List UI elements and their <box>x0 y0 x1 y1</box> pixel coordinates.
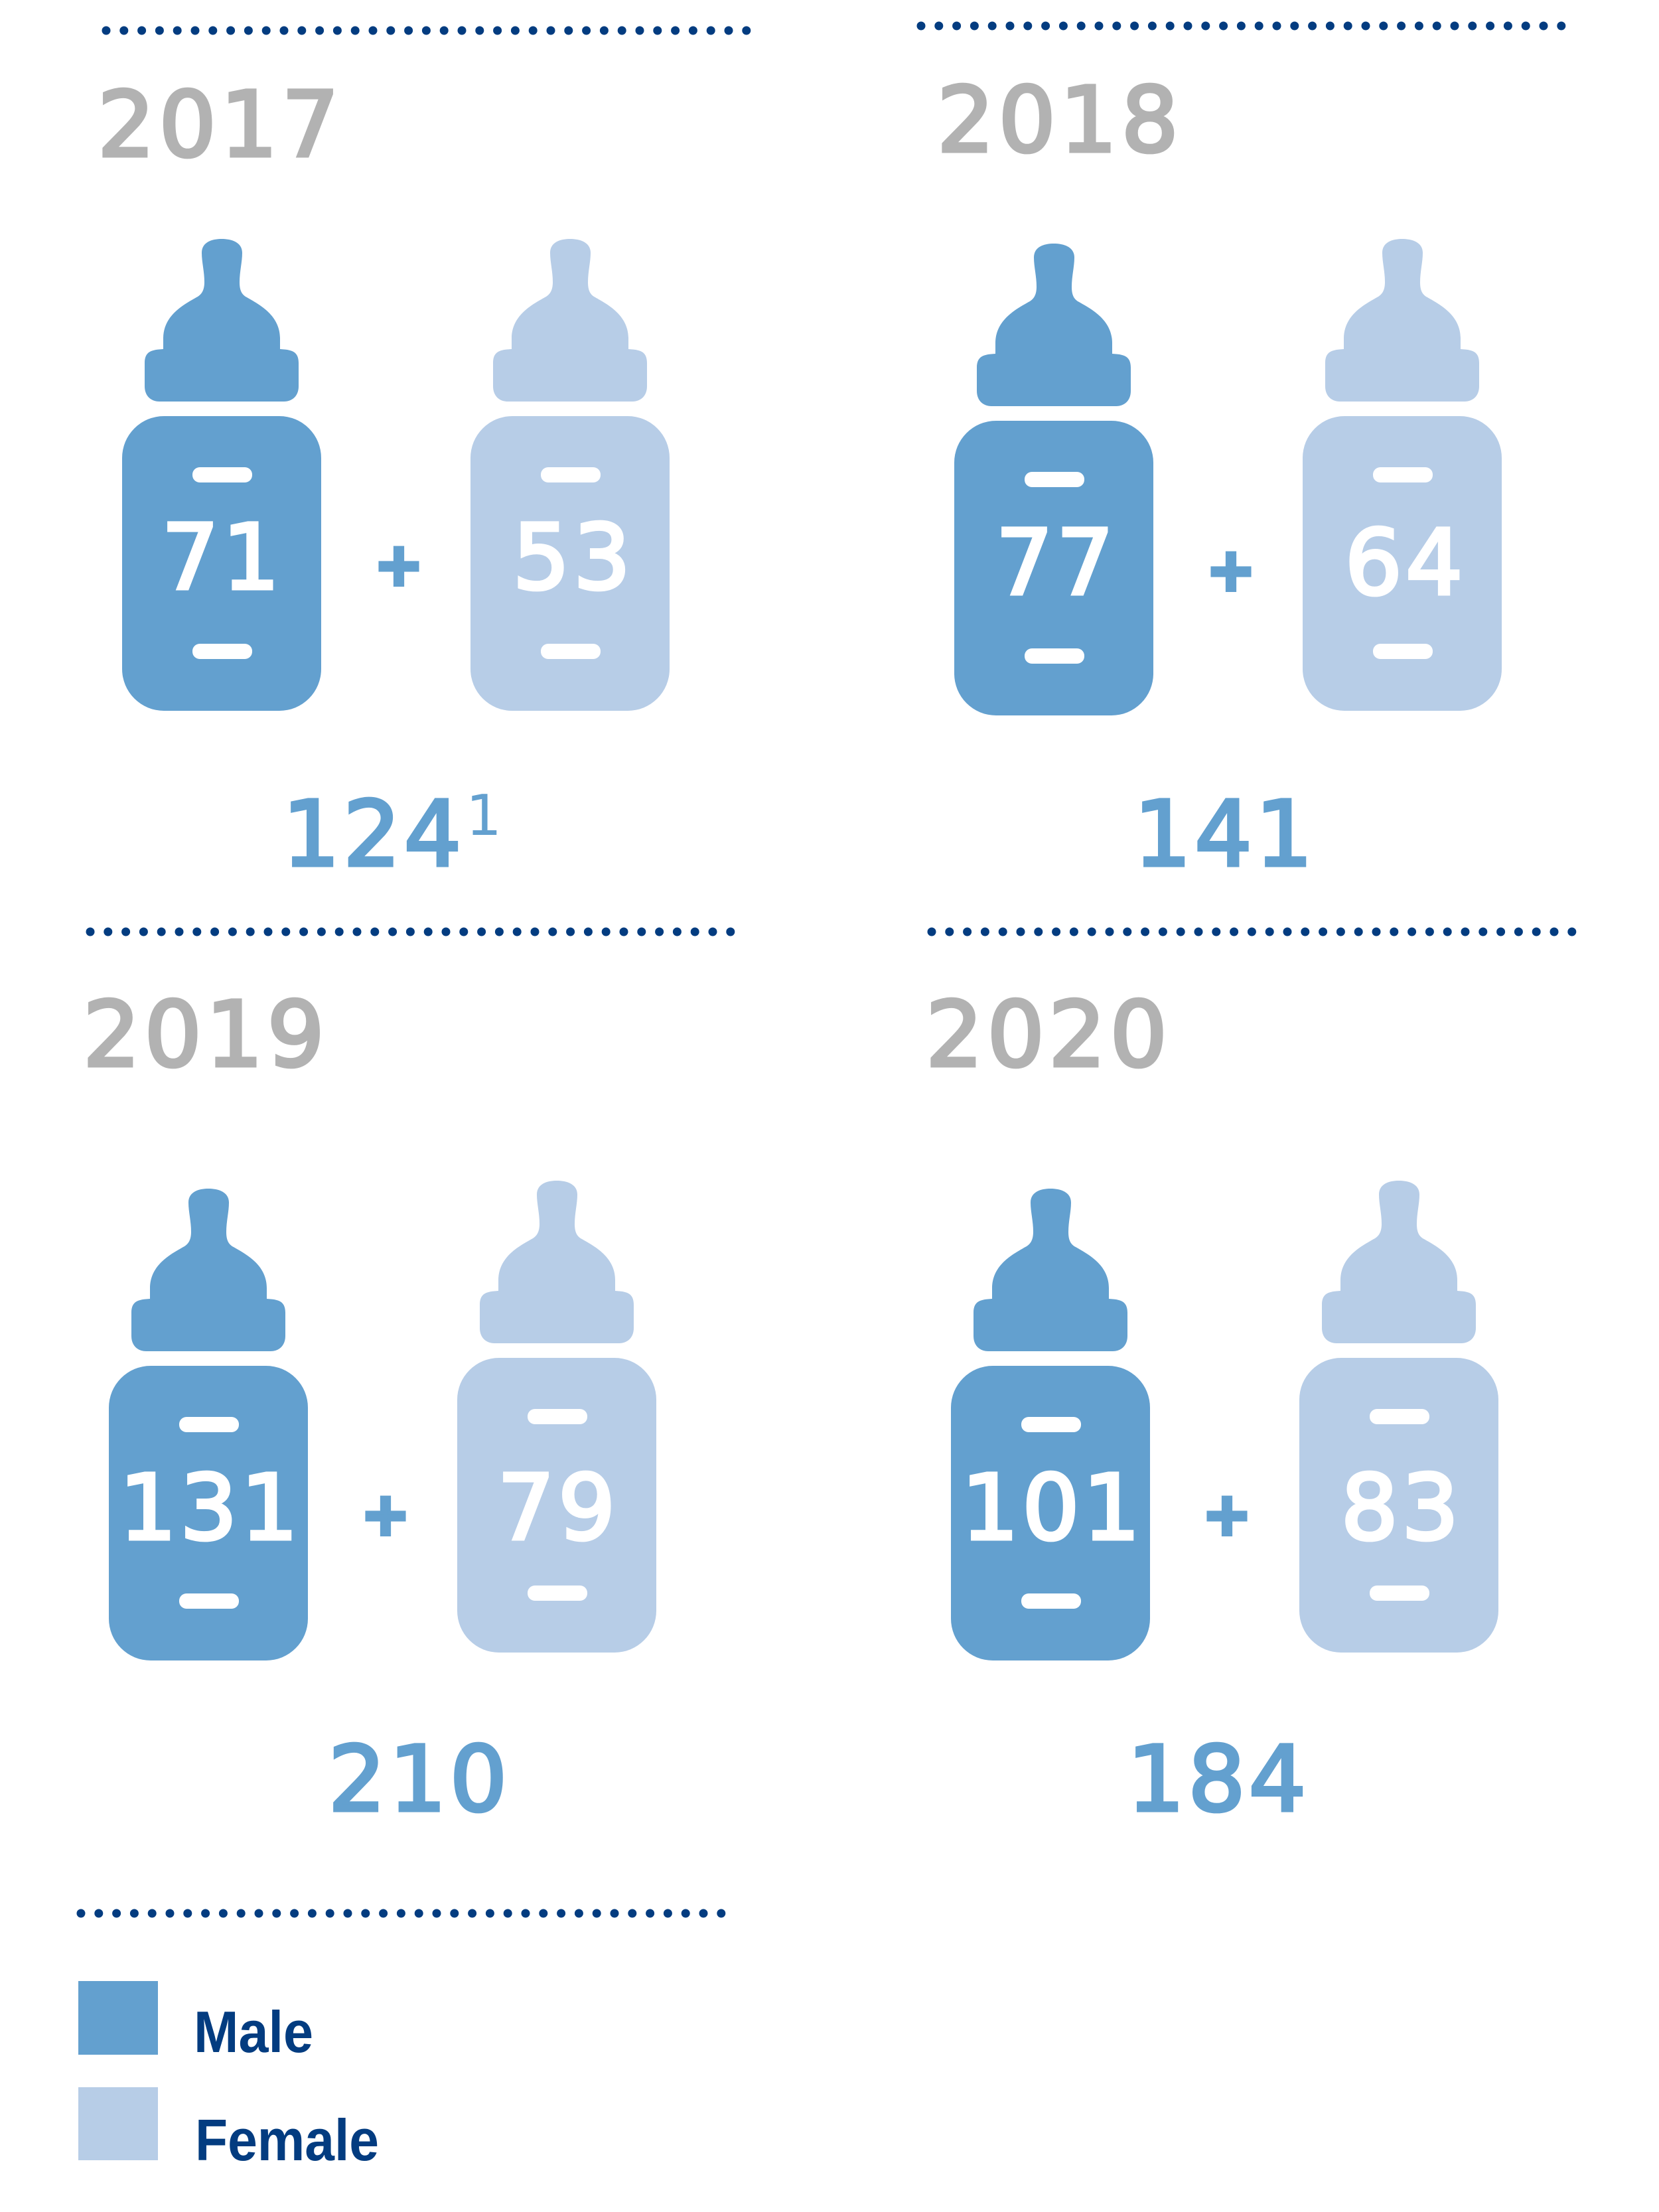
total: 2017: 124 <box>283 782 465 887</box>
icon: female bottle 2018 <box>1303 239 1502 711</box>
legend <box>78 1913 721 2173</box>
plus sign 2017: + <box>374 530 423 599</box>
icon: male bottle 2017 <box>122 239 321 711</box>
icon: female bottle 2020 <box>1299 1181 1498 1653</box>
divider: 2018 <box>921 21 1561 31</box>
footnote marker: 1 <box>466 783 502 849</box>
divider: 2020 <box>932 928 1572 936</box>
swatch: female <box>78 2087 158 2160</box>
icon: female bottle 2017 <box>470 239 670 711</box>
total: 2020: 184 <box>1127 1728 1309 1832</box>
value: female 2019: 79 <box>497 1456 619 1561</box>
value: male 2019: 131 <box>119 1456 301 1561</box>
divider: legend <box>81 1909 721 1918</box>
divider: 2019 <box>90 928 731 936</box>
icon: female bottle 2019 <box>457 1181 656 1653</box>
icon: male bottle 2020 <box>951 1189 1150 1660</box>
plus sign 2020: + <box>1202 1480 1252 1548</box>
swatch: male <box>78 1981 158 2055</box>
total: 2018: 141 <box>1134 782 1316 887</box>
heading: 2019: 2019 <box>83 983 328 1088</box>
panel: 2019 <box>83 932 731 1832</box>
panel: 2018 <box>921 26 1561 887</box>
panel: 2020 <box>926 932 1572 1832</box>
heading: 2017: 2017 <box>98 73 343 178</box>
total: 2019: 210 <box>328 1728 510 1832</box>
panel: 2017 <box>98 31 747 887</box>
plus sign 2019: + <box>361 1480 410 1548</box>
label: male: Male <box>194 1999 313 2065</box>
icon: male bottle 2018 <box>954 244 1153 715</box>
value: female 2017: 53 <box>512 506 634 611</box>
label: female: Female <box>195 2107 379 2173</box>
icon: male bottle 2019 <box>109 1189 308 1660</box>
value: female 2020: 83 <box>1340 1456 1463 1561</box>
value: male 2020: 101 <box>962 1456 1143 1561</box>
value: male 2018: 77 <box>995 511 1118 616</box>
divider: 2017 <box>106 27 747 35</box>
value: female 2018: 64 <box>1344 511 1467 616</box>
plus sign 2018: + <box>1206 536 1256 604</box>
value: male 2017: 71 <box>161 506 283 611</box>
heading: 2018: 2018 <box>937 68 1183 173</box>
heading: 2020: 2020 <box>926 983 1171 1088</box>
